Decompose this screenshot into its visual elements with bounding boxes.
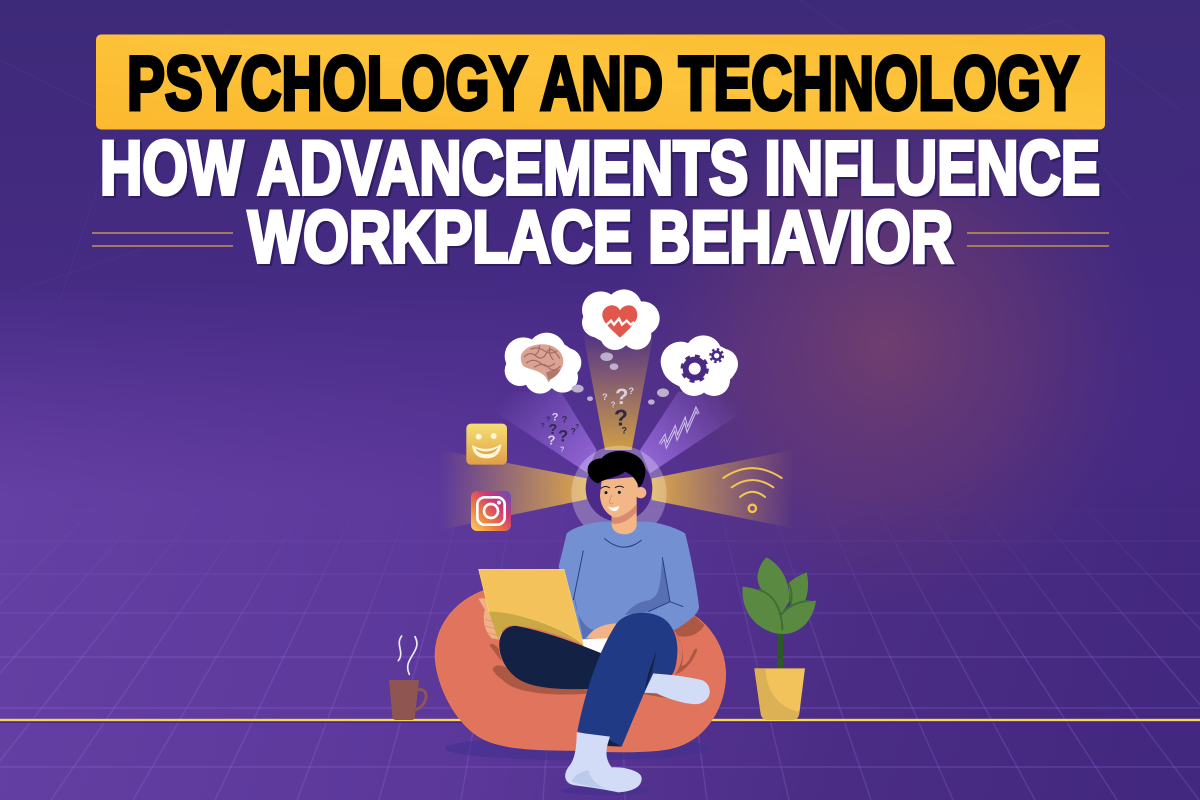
question marks: heart beam: ? <box>614 404 628 430</box>
face <box>600 477 638 517</box>
beam: wifi <box>652 450 793 528</box>
right title rules <box>967 233 1109 246</box>
question marks: brain beam: ? <box>546 414 551 423</box>
icon: smiley app <box>466 424 507 465</box>
question marks: heart beam: ? <box>611 400 616 409</box>
sock shadow <box>560 786 650 795</box>
left title rules <box>92 233 233 246</box>
beanbag shading <box>489 616 704 698</box>
question marks: heart beam: ? <box>621 425 627 435</box>
question marks: brain beam: ? <box>547 433 555 448</box>
thought cloud: heart <box>582 289 660 350</box>
far leg <box>499 626 602 689</box>
icon: small gear <box>710 349 723 362</box>
icon: wifi <box>723 468 782 512</box>
beanbag <box>435 590 726 752</box>
question marks: brain beam: ? <box>575 425 579 431</box>
question marks: brain beam <box>541 412 579 454</box>
hand on keyboard <box>587 623 618 640</box>
coffee mug <box>389 636 426 720</box>
ear <box>635 487 646 498</box>
plant <box>742 557 816 720</box>
thought cloud: gears <box>661 335 738 396</box>
head halo <box>571 446 667 541</box>
icon: instagram <box>471 491 511 531</box>
beam: apps <box>440 450 587 530</box>
person on beanbag <box>389 522 816 795</box>
icon: brain <box>521 344 563 383</box>
question marks: heart beam: ? <box>628 386 634 396</box>
plant pot <box>754 668 805 720</box>
keyboard <box>582 638 609 654</box>
lower sock <box>565 732 642 792</box>
question marks: brain beam: ? <box>548 422 557 438</box>
hair <box>588 451 646 487</box>
floor line <box>0 719 1200 723</box>
icon: large gear <box>682 356 707 381</box>
question marks: brain beam: ? <box>558 426 568 445</box>
near leg <box>577 613 677 747</box>
subtitle line 2: WORKPLACE BEHAVIOR <box>248 197 953 278</box>
beanbag shadow <box>445 736 712 760</box>
icon: heart <box>602 305 637 338</box>
question marks: brain beam: ? <box>552 412 559 424</box>
question marks: heart beam: ? <box>615 384 628 409</box>
hand holding laptop <box>478 598 502 640</box>
steam <box>398 636 417 674</box>
title banner <box>96 34 1105 130</box>
neck <box>612 497 637 534</box>
question marks: brain beam: ? <box>571 426 576 436</box>
question marks: brain beam: ? <box>560 445 565 454</box>
beam: gears <box>640 392 768 473</box>
neck shadow <box>612 503 637 524</box>
thought bubbles <box>572 352 669 405</box>
question marks: brain beam: ? <box>562 415 568 425</box>
zigzag signal <box>660 409 698 445</box>
head <box>588 451 646 534</box>
question marks: heart beam <box>602 384 634 435</box>
thought and technology illustration <box>440 289 793 541</box>
question marks: heart beam: ? <box>602 392 608 402</box>
facial features <box>601 486 624 511</box>
question marks: brain beam: ? <box>541 422 545 429</box>
near foot sock <box>644 673 710 704</box>
thought cloud: brain <box>505 333 581 394</box>
sweater <box>559 522 699 654</box>
laptop <box>479 569 583 645</box>
beam: brain <box>467 390 597 473</box>
beam: heart <box>583 335 653 450</box>
